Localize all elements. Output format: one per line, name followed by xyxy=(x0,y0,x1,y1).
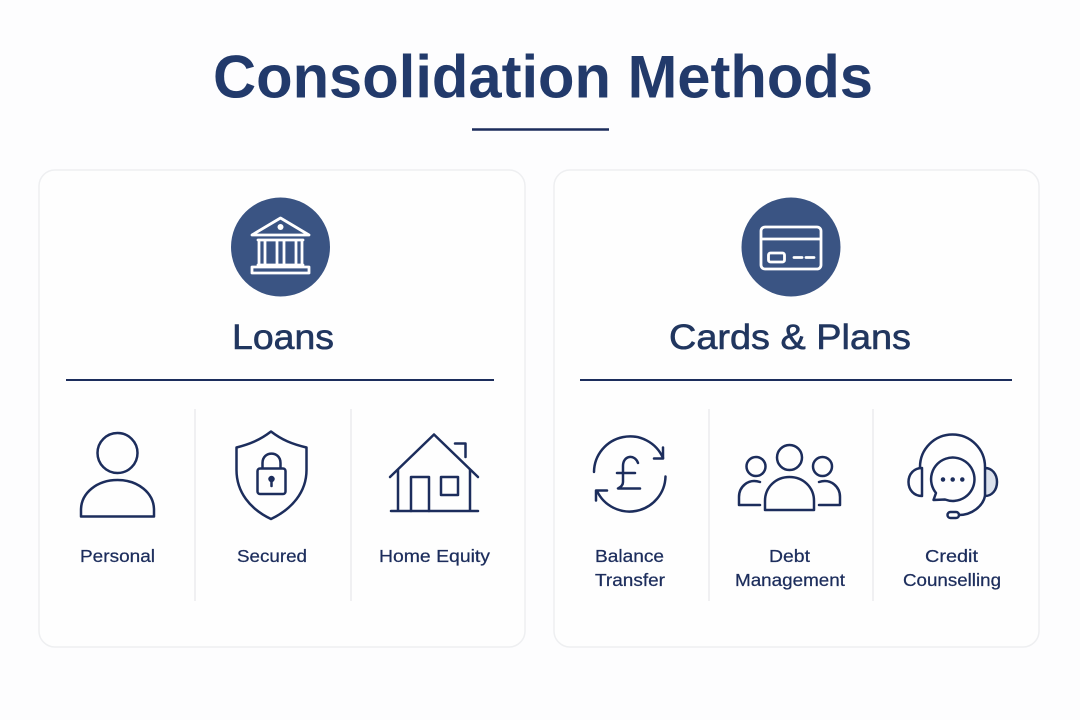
icon: headset with chat bubble xyxy=(908,434,997,518)
label: credit counselling: Credit xyxy=(925,546,978,566)
label: balance transfer xyxy=(595,546,665,590)
label: debt management: Debt xyxy=(769,546,810,566)
heading: cards and plans: Cards & Plans xyxy=(669,318,911,357)
label: balance transfer: Transfer xyxy=(595,570,665,590)
icon: balance transfer xyxy=(594,436,666,512)
label: credit counselling: Counselling xyxy=(903,570,1001,590)
icon: group of people xyxy=(739,445,840,510)
label: secured: Secured xyxy=(237,546,307,566)
icon: house xyxy=(390,434,478,511)
label: debt management: Management xyxy=(735,570,845,590)
icon: bank xyxy=(231,198,330,296)
panel: loans xyxy=(39,170,525,647)
heading: loans: Loans xyxy=(232,318,334,357)
panel: cards and plans xyxy=(554,170,1039,647)
icon: person xyxy=(81,433,154,516)
label: personal: Personal xyxy=(80,546,155,566)
icon: credit card xyxy=(742,198,840,296)
label: balance transfer: Balance xyxy=(595,546,664,566)
icon: shield with lock xyxy=(236,432,306,519)
label: home equity: Home Equity xyxy=(379,546,490,566)
title: Consolidation Methods xyxy=(213,44,873,110)
label: debt management xyxy=(735,546,845,590)
label: credit counselling xyxy=(903,546,1001,590)
